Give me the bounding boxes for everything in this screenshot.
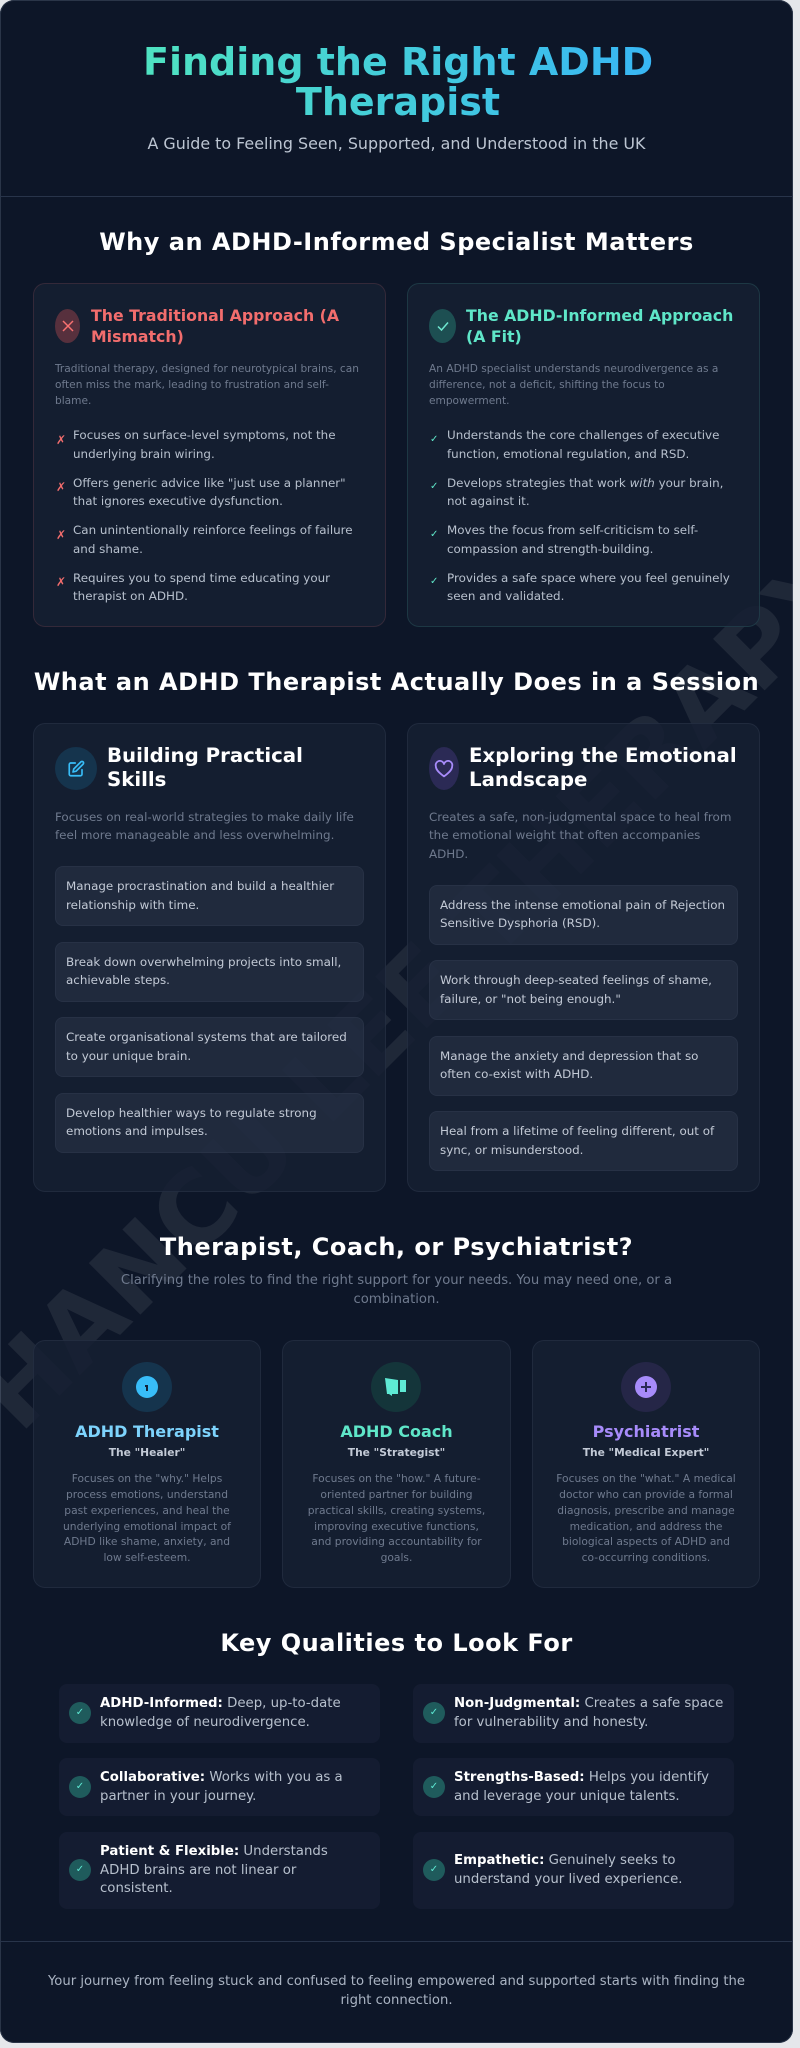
- text: psychiatrist description: biological aspects of ADHD and: [562, 1535, 730, 1548]
- list: adhd-informed points: [430, 428, 730, 603]
- text: coach description: improving executive functions,: [314, 1520, 479, 1533]
- icon: check: [429, 309, 456, 343]
- list: traditional points: ✗: [56, 480, 66, 494]
- text: psychiatrist description: medication, and address the: [570, 1520, 722, 1533]
- quality: patient and flexible: [59, 1832, 380, 1909]
- item: organisational systems: to your unique brain.: [66, 1048, 191, 1062]
- item: break down projects: [55, 942, 364, 1002]
- list: adhd-informed points: ✓: [430, 481, 438, 492]
- item: lifetime: sync, or misunderstood.: [440, 1142, 583, 1156]
- quality: adhd-informed: ADHD-Informed: Deep, up-to-date: [100, 1696, 341, 1711]
- text: traditional intro: blame.: [55, 395, 91, 407]
- text: coach description: [308, 1472, 485, 1564]
- quality: non-judgmental: Non-Judgmental: Creates a safe space: [454, 1696, 723, 1711]
- footer text: [48, 1974, 745, 2008]
- heading: building skills: Skills: [107, 768, 166, 791]
- text: coach description: goals.: [381, 1551, 412, 1564]
- text: emotional intro: the emotional weight that often accompanies: [429, 828, 700, 842]
- list: adhd-informed points: compassion and strength-building.: [447, 542, 653, 556]
- panel: building practical skills: [33, 723, 386, 1192]
- heading: emotional landscape: Landscape: [469, 768, 587, 791]
- text: therapist description: process emotions, understand: [66, 1488, 228, 1501]
- list: adhd-informed points: Provides a safe space where you feel genuinely: [447, 570, 730, 584]
- heading: coach: ADHD Coach: [340, 1422, 453, 1441]
- heading: traditional: [91, 306, 339, 346]
- text: emotional intro: ADHD.: [429, 847, 468, 861]
- item: break down projects: achievable steps.: [66, 973, 170, 987]
- list: adhd-informed points: function, emotional regulation, and RSD.: [447, 446, 689, 460]
- quality: adhd-informed: ✓: [76, 1707, 84, 1718]
- text: traditional intro: Traditional therapy, designed for neurotypical brains, can: [55, 363, 359, 375]
- heading: what a therapist does: What an ADHD Therapist Actually Does in a Session: [34, 668, 759, 696]
- list: traditional points: [56, 428, 353, 603]
- quality: collaborative: ✓: [76, 1781, 84, 1792]
- quality: patient and flexible: ADHD brains are not linear or: [100, 1862, 296, 1878]
- item: regulate emotions: emotions and impulses.: [66, 1124, 208, 1138]
- quality: strengths-based: Strengths-Based: Helps you identify: [454, 1770, 709, 1785]
- quality: strengths-based: and leverage your unique talents.: [454, 1788, 680, 1804]
- heading: adhd-informed: (A Fit): [466, 327, 522, 346]
- heading: key qualities: Key Qualities to Look For: [220, 1629, 573, 1657]
- text: coach description: Focuses on the "how." A future-: [312, 1472, 481, 1485]
- title: [143, 42, 653, 122]
- icon: coach: [371, 1362, 421, 1412]
- text: building skills intro: feel more manageable and less overwhelming.: [55, 828, 334, 842]
- footer: [0, 1941, 793, 2043]
- quality: adhd-informed: knowledge of neurodivergence.: [100, 1714, 310, 1730]
- text: roles intro: combination.: [353, 1292, 440, 1306]
- text: adhd-informed intro: An ADHD specialist understands neurodivergence as a: [429, 363, 718, 375]
- quality: empathetic: ✓: [430, 1864, 438, 1875]
- icon: cross: [55, 309, 80, 343]
- item: lifetime: [429, 1111, 738, 1171]
- heading: psychiatrist: Psychiatrist: [593, 1422, 699, 1441]
- heading: traditional: The Traditional Approach (A: [91, 306, 339, 325]
- list: adhd-informed points: ✓: [430, 576, 438, 587]
- subtitle: A Guide to Feeling Seen, Supported, and Understood in the UK: [148, 134, 645, 153]
- panel: traditional approach: [33, 283, 386, 627]
- icon: therapist: [122, 1362, 172, 1412]
- quality: non-judgmental: for vulnerability and honesty.: [454, 1714, 648, 1730]
- title: Finding the Right ADHD: [143, 40, 653, 84]
- list: adhd-informed points: Moves the focus from self-criticism to self-: [447, 523, 698, 537]
- header: [0, 0, 793, 197]
- list: traditional points: Can unintentionally reinforce feelings of failure: [73, 523, 353, 537]
- text: emotional intro: Creates a safe, non-judgmental space to heal from: [429, 810, 731, 824]
- panel: emotional landscape: [407, 723, 760, 1192]
- text: adhd-informed intro: [429, 363, 718, 407]
- text: therapist description: past experiences, and heal the: [64, 1504, 230, 1517]
- quality: strengths-based: ✓: [430, 1781, 438, 1792]
- quality: patient and flexible: consistent.: [100, 1881, 173, 1896]
- item: organisational systems: [55, 1017, 364, 1077]
- panel: adhd-informed approach: [407, 283, 760, 627]
- text: emotional intro: [429, 810, 731, 861]
- heading: building skills: Building Practical: [107, 744, 303, 767]
- footer text: Your journey from feeling stuck and confused to feeling empowered and supported starts with finding the: [48, 1974, 745, 1989]
- item: shame: [429, 960, 738, 1020]
- item: anxiety: often co-exist with ADHD.: [440, 1067, 593, 1081]
- text: psychiatrist description: [556, 1472, 736, 1564]
- item: organisational systems: Create organisational systems that are tailored: [66, 1030, 347, 1044]
- heading: traditional: Mismatch): [91, 327, 184, 346]
- item: rsd: Sensitive Dysphoria (RSD).: [440, 916, 600, 930]
- panel: psychiatrist: [532, 1340, 760, 1588]
- icon: heart: [429, 747, 459, 790]
- heading: therapist: ADHD Therapist: [75, 1422, 219, 1441]
- quality: collaborative: Collaborative: Works with you as a: [100, 1770, 343, 1785]
- text: building skills intro: Focuses on real-world strategies to make daily life: [55, 810, 354, 824]
- list: traditional points: Focuses on surface-level symptoms, not the: [73, 428, 336, 442]
- text: psychiatrist description: co-occurring conditions.: [582, 1551, 710, 1564]
- heading: therapist coach psychiatrist: Therapist, Coach, or Psychiatrist?: [160, 1233, 633, 1261]
- text: adhd-informed intro: empowerment.: [429, 395, 509, 407]
- quality: empathetic: [413, 1832, 734, 1909]
- heading: building skills: [107, 744, 303, 791]
- list: adhd-informed points: ✓: [430, 528, 438, 540]
- text: psychiatrist description: Focuses on the "what." A medical: [556, 1472, 736, 1485]
- text: traditional intro: often miss the mark, leading to frustration and self-: [55, 379, 329, 391]
- list: traditional points: ✗: [56, 528, 66, 542]
- panel: adhd coach: [282, 1340, 511, 1588]
- icon: pencil: [55, 747, 97, 790]
- list: traditional points: therapist on ADHD.: [73, 589, 188, 603]
- item: rsd: [429, 884, 738, 944]
- item: procrastination: [55, 866, 364, 926]
- list: traditional points: Offers generic advice like "just use a planner": [73, 476, 346, 490]
- quality: strengths-based: [413, 1758, 734, 1816]
- text: coach description: oriented partner for building: [320, 1488, 473, 1501]
- item: anxiety: [429, 1036, 738, 1096]
- item: rsd: Address the intense emotional pain of Rejection: [440, 898, 725, 912]
- list: traditional points: underlying brain wiring.: [73, 446, 215, 460]
- item: break down projects: Break down overwhelming projects into small,: [66, 954, 341, 968]
- item: shame: failure, or "not being enough.": [440, 992, 621, 1006]
- text: therapist description: underlying emotional impact of: [63, 1520, 231, 1533]
- text: psychiatrist description: doctor who can provide a formal: [559, 1488, 733, 1501]
- quality: patient and flexible: ✓: [76, 1864, 84, 1875]
- subheading: medical expert: The "Medical Expert": [583, 1446, 709, 1459]
- quality: adhd-informed: [59, 1684, 380, 1743]
- text: roles intro: [121, 1273, 672, 1306]
- list: adhd-informed points: ✓: [430, 434, 438, 444]
- text: coach description: and providing accountability for: [311, 1535, 482, 1548]
- list: adhd-informed points: seen and validated.: [447, 589, 564, 603]
- item: procrastination: relationship with time.: [66, 898, 199, 912]
- quality: patient and flexible: Patient & Flexible: Understands: [100, 1844, 328, 1859]
- subheading: strategist: The "Strategist": [348, 1446, 445, 1459]
- text: therapist description: low self-esteem.: [103, 1551, 191, 1564]
- item: regulate emotions: [55, 1092, 364, 1152]
- subheading: healer: The "Healer": [109, 1446, 185, 1459]
- text: traditional intro: [55, 363, 359, 407]
- item: regulate emotions: Develop healthier ways to regulate strong: [66, 1106, 317, 1120]
- list: adhd-informed points: Understands the core challenges of executive: [447, 428, 719, 442]
- heading: adhd-informed: [466, 306, 733, 346]
- quality: collaborative: partner in your journey.: [100, 1788, 256, 1804]
- quality: non-judgmental: [413, 1684, 734, 1743]
- item: anxiety: Manage the anxiety and depression that so: [440, 1048, 698, 1062]
- heading: adhd-informed: The ADHD-Informed Approach: [466, 306, 733, 325]
- text: psychiatrist description: diagnosis, prescribe and manage: [557, 1504, 735, 1517]
- title: Therapist: [296, 80, 500, 124]
- item: procrastination: Manage procrastination and build a healthier: [66, 879, 334, 893]
- list: traditional points: ✗: [56, 575, 66, 589]
- item: shame: Work through deep-seated feelings of shame,: [440, 973, 712, 987]
- quality: empathetic: understand your lived experience.: [454, 1872, 682, 1886]
- item: lifetime: Heal from a lifetime of feeling different, out of: [440, 1124, 714, 1138]
- list: traditional points: ✗: [56, 432, 66, 446]
- panel: adhd therapist: [33, 1340, 261, 1588]
- heading: emotional landscape: [469, 744, 737, 791]
- text: coach description: practical skills, creating systems,: [308, 1504, 485, 1517]
- heading: emotional landscape: Exploring the Emotional: [469, 744, 737, 767]
- text: therapist description: ADHD like shame, anxiety, and: [64, 1535, 230, 1548]
- list: traditional points: that ignores executive dysfunction.: [73, 494, 283, 508]
- text: therapist description: [63, 1472, 232, 1564]
- text: building skills intro: [55, 810, 354, 842]
- list: adhd-informed points: not against it.: [447, 494, 530, 508]
- text: therapist description: Focuses on the "why." Helps: [72, 1472, 222, 1485]
- quality: collaborative: [59, 1758, 380, 1816]
- quality: non-judgmental: ✓: [430, 1707, 438, 1718]
- text: roles intro: Clarifying the roles to find the right support for your needs. You may need one, or a: [121, 1273, 672, 1288]
- icon: psychiatrist: [621, 1362, 671, 1412]
- list: traditional points: and shame.: [73, 542, 143, 556]
- footer text: right connection.: [340, 1992, 453, 2008]
- quality: empathetic: Empathetic: Genuinely seeks to: [454, 1853, 676, 1868]
- list: traditional points: Requires you to spend time educating your: [73, 570, 330, 584]
- text: adhd-informed intro: difference, not a deficit, shifting the focus to: [429, 379, 665, 391]
- list: adhd-informed points: Develops strategies that work with your brain,: [447, 476, 723, 490]
- heading: why specialist matters: Why an ADHD-Informed Specialist Matters: [99, 228, 694, 256]
